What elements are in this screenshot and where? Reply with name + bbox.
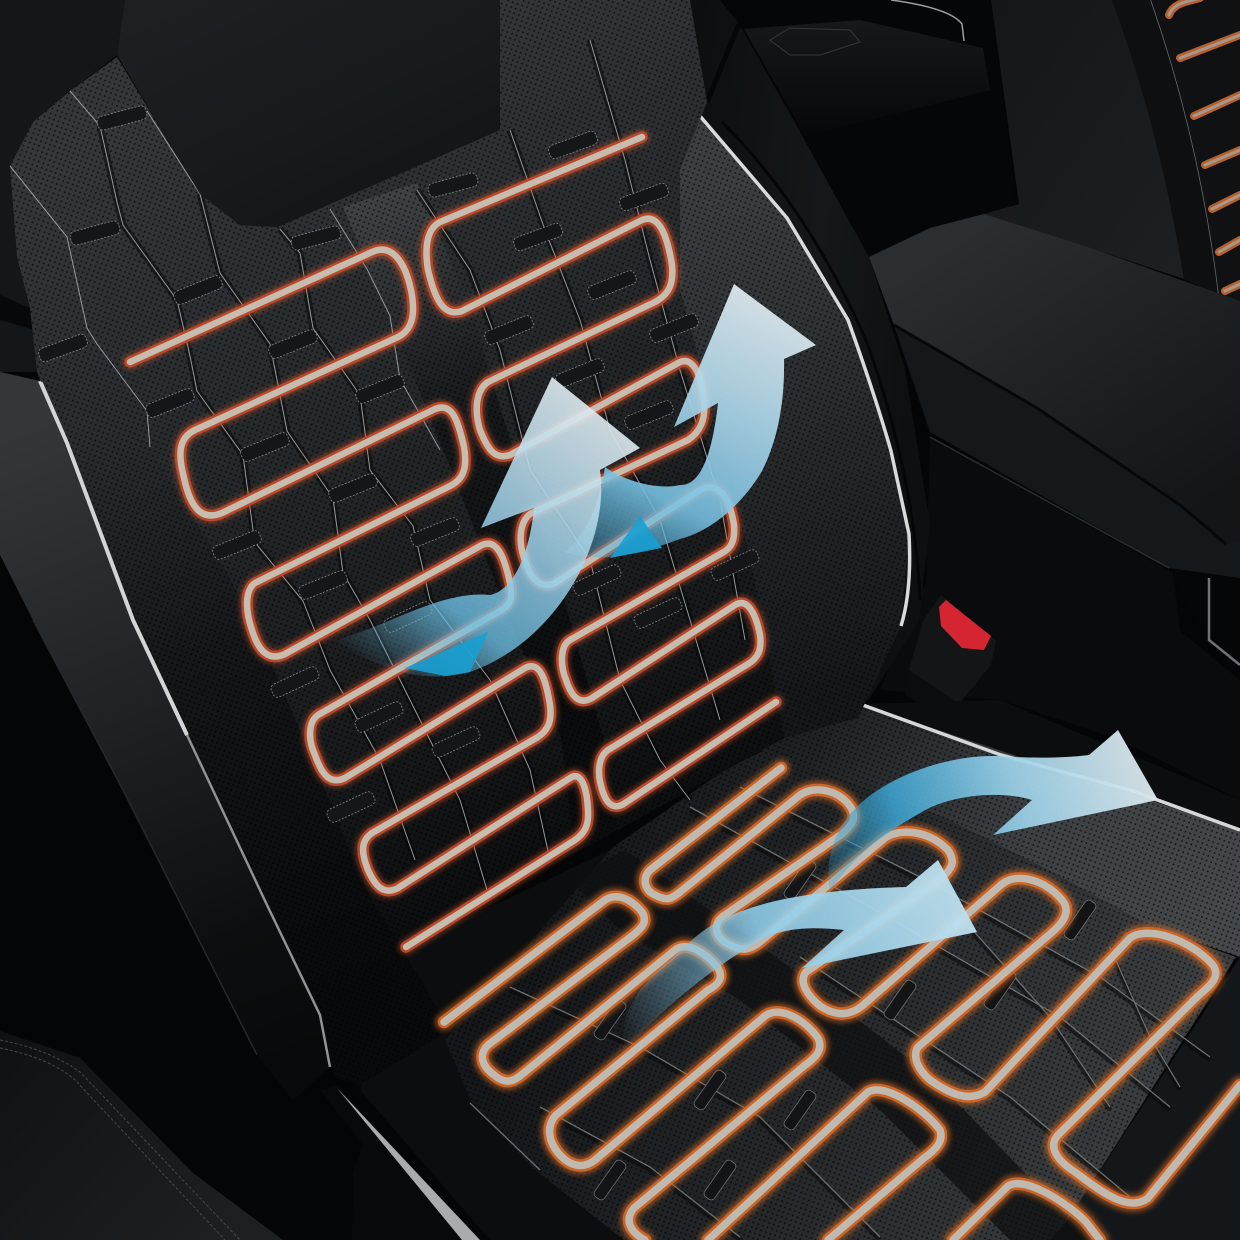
seat cushion left flat bbox=[360, 850, 624, 1240]
heating coil: cushion left bbox=[444, 897, 1100, 1240]
airflow arrow: backrest right bbox=[565, 284, 816, 558]
stitched tabs bbox=[37, 105, 761, 824]
console side bbox=[880, 437, 1240, 800]
center channel bbox=[343, 183, 618, 850]
left perforated panel bbox=[40, 381, 450, 1085]
cushion quilting seams: shadow bbox=[510, 790, 1210, 1240]
backrest top left shoulder bbox=[0, 0, 125, 372]
rear left seat bbox=[0, 1031, 283, 1240]
seat cushion quilted panel bbox=[445, 750, 1236, 1240]
armrest side bbox=[894, 325, 1240, 578]
backrest left side bolster bbox=[0, 372, 450, 1100]
heating coil: cushion right bbox=[645, 768, 1240, 1203]
passenger seat coil strip bbox=[1169, 0, 1240, 291]
backrest quilted panel bbox=[10, 0, 784, 945]
right white piping bbox=[700, 116, 910, 626]
buckle red button bbox=[939, 600, 991, 650]
heating coil: backrest left bbox=[130, 250, 588, 947]
seat belt buckle bbox=[905, 595, 996, 720]
seat cushion side bolster bbox=[760, 700, 1240, 1240]
cushion stitched tabs bbox=[592, 859, 1098, 1201]
passenger seat bbox=[984, 0, 1240, 301]
area above the piping bbox=[860, 700, 1240, 830]
backrest right outer bolster bbox=[680, 0, 930, 738]
deep blue overlap bbox=[405, 632, 488, 676]
cushion quilting seams: highlight bbox=[470, 787, 1210, 1237]
airflow arrow: cushion rear bbox=[828, 730, 1158, 892]
deep blue overlap bbox=[610, 516, 662, 558]
cushion white piping bbox=[860, 704, 1240, 830]
airflow arrow: backrest center bbox=[335, 377, 640, 676]
airflow arrow: cushion front bbox=[623, 860, 977, 1050]
rear cushion in background bbox=[744, 0, 1016, 257]
cushion middle channel bbox=[570, 850, 1090, 1240]
backrest right perforated bolster bbox=[680, 116, 910, 738]
heating coil: backrest right bbox=[426, 137, 776, 806]
seat lower side trim bbox=[320, 1085, 480, 1240]
center armrest bbox=[869, 214, 1240, 800]
left white piping bbox=[40, 381, 187, 735]
backrest quilting seams bbox=[10, 40, 745, 900]
seam shadows bbox=[100, 40, 745, 900]
headrest base bbox=[20, 0, 500, 227]
